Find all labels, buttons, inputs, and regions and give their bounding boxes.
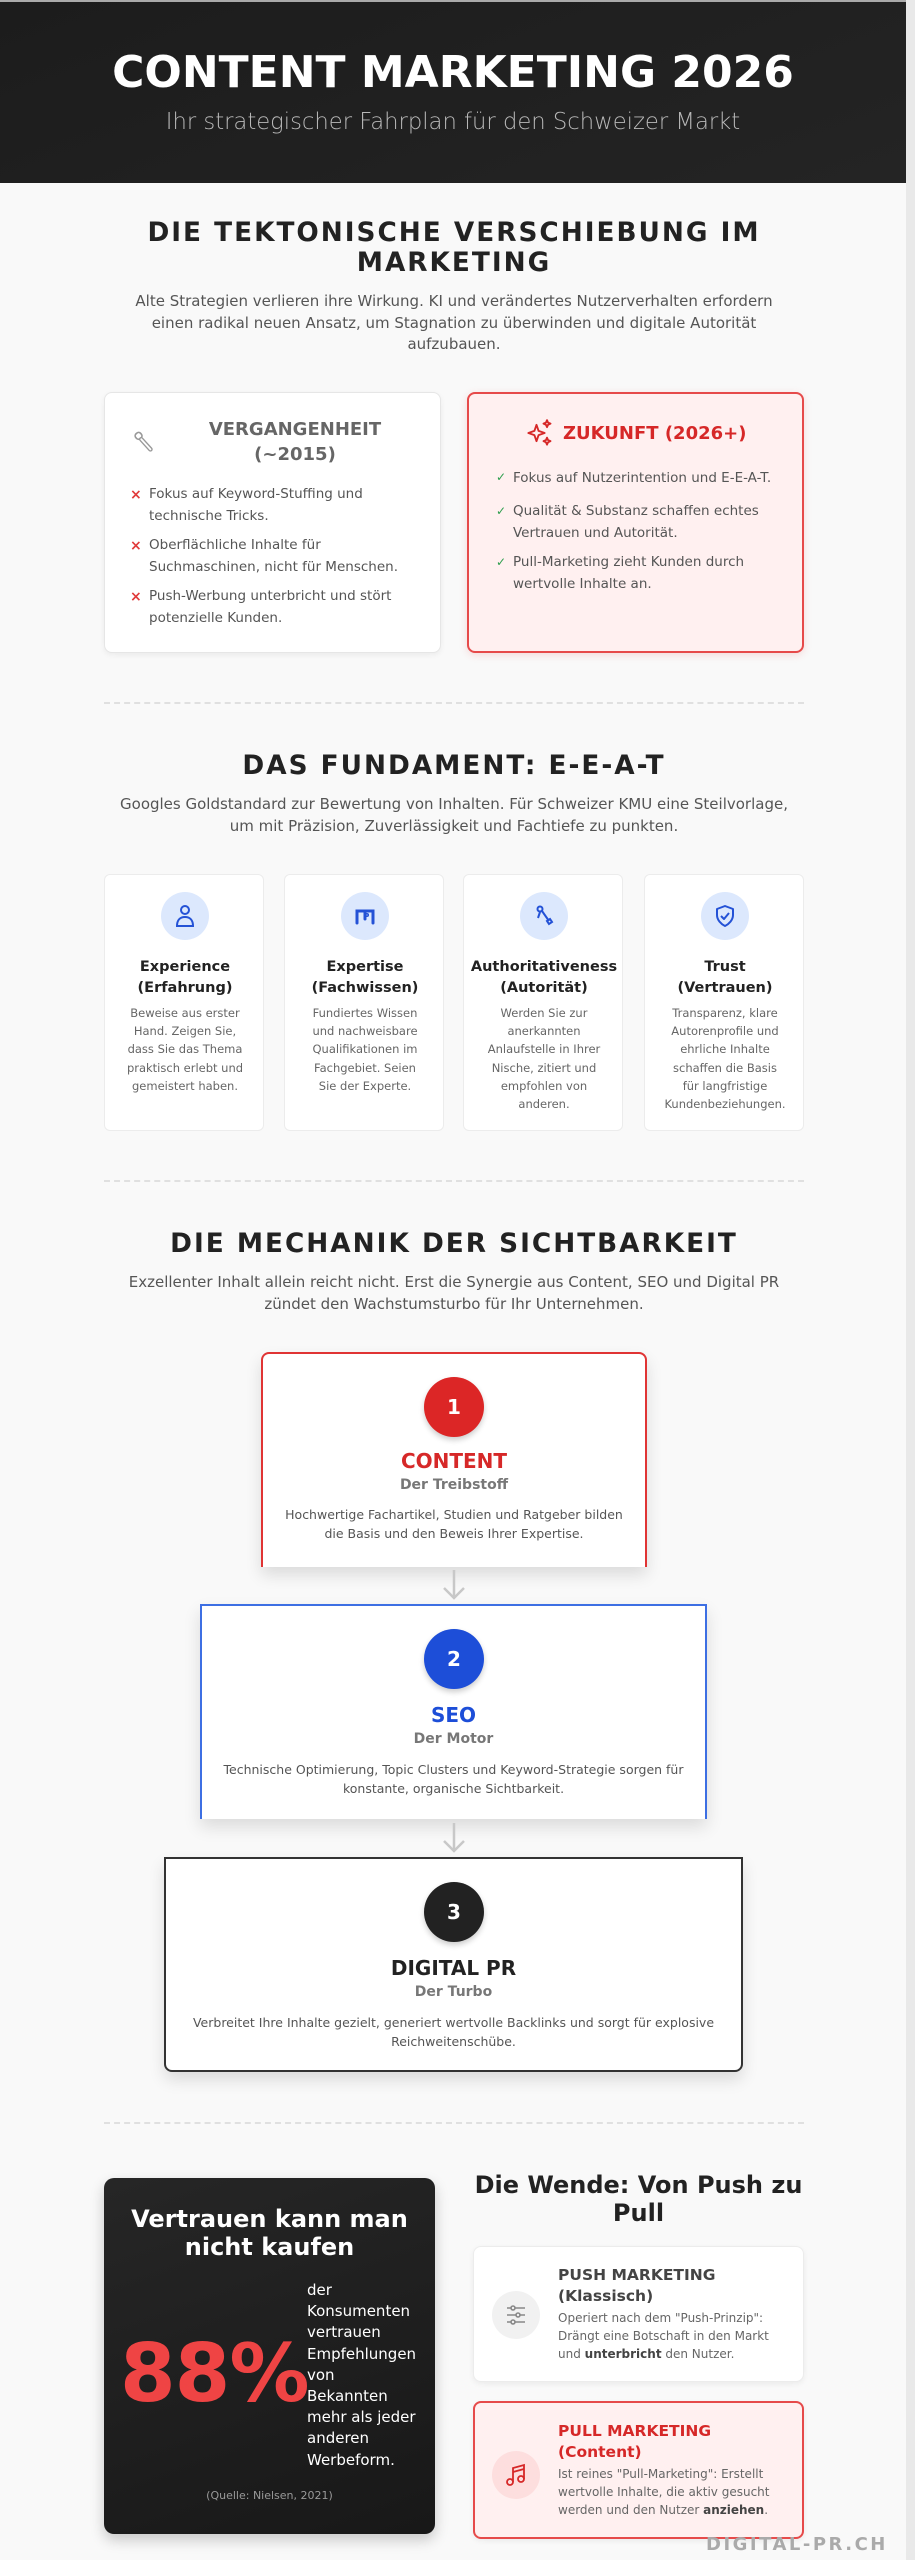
intro text 1 (135, 292, 773, 353)
intro text 3 (129, 1273, 779, 1312)
badge 1: 1 (447, 1395, 461, 1419)
big number: 88% (120, 2327, 308, 2420)
text (127, 1006, 243, 1093)
text: anerkannten (507, 1024, 581, 1038)
panel: pull marketing (473, 2401, 804, 2539)
bullet list: × (130, 589, 142, 605)
text: Werden Sie zur (501, 1006, 587, 1020)
text: Drängt eine Botschaft in den Markt (558, 2329, 769, 2343)
title: CONTENT MARKETING 2026 (112, 47, 794, 98)
panel: expertise (284, 874, 444, 1131)
bullet list: technische Tricks. (149, 508, 269, 524)
subtitle: Ihr strategischer Fahrplan für den Schweizer Markt (166, 109, 740, 135)
panel: digital pr step (164, 1857, 743, 2072)
text: Transparenz, klare (672, 1006, 778, 1020)
text (193, 2015, 714, 2049)
text: und unterbricht den Nutzer. (558, 2347, 734, 2361)
panel: zukunft (467, 392, 804, 653)
text: wertvolle Inhalte, die aktiv gesucht (558, 2485, 769, 2499)
panel: content step (261, 1352, 647, 1567)
header (0, 0, 906, 183)
title: SEO (431, 1703, 476, 1727)
stat text: der (307, 2281, 332, 2299)
heading: ZUKUNFT (2026+) (563, 423, 746, 444)
title: (Erfahrung) (138, 980, 232, 996)
stat text: vertrauen (307, 2323, 381, 2341)
title: Authoritativeness (471, 959, 617, 975)
source: (Quelle: Nielsen, 2021) (206, 2489, 333, 2502)
section heading: tektonische verschiebung: MARKETING (357, 248, 551, 278)
text: Verbreitet Ihre Inhalte gezielt, generiert wertvolle Backlinks und sorgt für explosive (193, 2015, 714, 2030)
text: ehrliche Inhalte (680, 1042, 770, 1056)
title: (Autorität) (500, 980, 588, 996)
bullet list: Push-Werbung unterbricht und stört (149, 588, 391, 604)
intro text 2: Googles Goldstandard zur Bewertung von Inhalten. Für Schweizer KMU eine Steilvorlage, (120, 795, 788, 813)
title (138, 959, 232, 996)
icon: music (492, 2451, 540, 2499)
text: Autorenprofile und (671, 1024, 779, 1038)
bullet list: Oberflächliche Inhalte für (149, 537, 321, 553)
title (558, 2266, 715, 2305)
title: (Fachwissen) (312, 980, 418, 996)
title: DIGITAL PR (391, 1956, 516, 1980)
stat text: Werbeform. (307, 2451, 395, 2469)
heading (209, 419, 382, 465)
text (558, 2311, 769, 2361)
section heading: tektonische verschiebung: DIE TEKTONISCHE VERSCHIEBUNG IM (147, 218, 761, 248)
text: Hochwertige Fachartikel, Studien und Ratgeber bilden (285, 1507, 623, 1522)
text: Fundiertes Wissen (313, 1006, 417, 1020)
text: empfohlen von (501, 1079, 587, 1093)
title (312, 959, 418, 996)
check list: ✓ (496, 555, 506, 569)
title: Expertise (326, 959, 404, 975)
text: Nische, zitiert und (492, 1061, 596, 1075)
bullet list: potenzielle Kunden. (149, 610, 282, 626)
intro text 1: aufzubauen. (407, 335, 501, 353)
intro text 3: Exzellenter Inhalt allein reicht nicht. Erst die Synergie aus Content, SEO und Digital PR (129, 1273, 779, 1291)
text (312, 1006, 418, 1093)
text: Sie der Experte. (319, 1079, 411, 1093)
footer brand: DIGITAL-PR.CH (706, 2534, 888, 2555)
text: und nachweisbare (312, 1024, 418, 1038)
text: für langfristige (683, 1079, 767, 1093)
section heading: mechanik: DIE MECHANIK DER SICHTBARKEIT (170, 1229, 738, 1259)
icon: expertise (341, 892, 389, 940)
badge 1 (424, 1377, 484, 1437)
text (664, 1006, 786, 1111)
check list: Vertrauen und Autorität. (513, 525, 678, 541)
text: schaffen die Basis (673, 1061, 777, 1075)
title: (Vertrauen) (677, 980, 772, 996)
title (558, 2422, 711, 2461)
intro text 3: zündet den Wachstumsturbo für Ihr Unternehmen. (264, 1294, 644, 1312)
text (488, 1006, 600, 1111)
intro text 2 (120, 795, 788, 834)
title: (Klassisch) (558, 2287, 653, 2305)
stat text: anderen (307, 2429, 369, 2447)
check list: Pull-Marketing zieht Kunden durch (513, 554, 744, 570)
badge 2 (424, 1629, 484, 1689)
title: CONTENT (401, 1449, 507, 1473)
check list: ✓ (496, 470, 506, 484)
panel: experience (104, 874, 264, 1131)
stat text: Konsumenten (307, 2302, 410, 2320)
section heading: e-e-a-t: DAS FUNDAMENT: E-E-A-T (242, 751, 666, 781)
icon: authority (520, 892, 568, 940)
arrow 2 (443, 1823, 465, 1852)
check list (496, 470, 771, 592)
text (223, 1762, 684, 1796)
title: (Content) (558, 2443, 642, 2461)
text: Technische Optimierung, Topic Clusters und Keyword-Strategie sorgen für (224, 1762, 684, 1777)
text: Reichweitenschübe. (391, 2034, 516, 2049)
icon: sliders (492, 2291, 540, 2339)
bullet list: × (130, 487, 142, 503)
heading: Vertrauen kann man (131, 2205, 408, 2233)
intro text 1: einen radikal neuen Ansatz, um Stagnation zu überwinden und digitale Autorität (152, 314, 756, 332)
text: Hand. Zeigen Sie, (134, 1024, 236, 1038)
text: gemeistert haben. (132, 1079, 238, 1093)
title: PUSH MARKETING (558, 2266, 715, 2284)
text: dass Sie das Thema (128, 1042, 242, 1056)
title: PULL MARKETING (558, 2422, 711, 2440)
check list: ✓ (496, 504, 506, 518)
heading: push to pull: Die Wende: Von Push zu (475, 2171, 802, 2199)
heading: push to pull: Pull (613, 2199, 664, 2227)
heading: (~2015) (254, 444, 336, 465)
text (558, 2467, 770, 2517)
icon: shield (701, 892, 749, 940)
subtitle: Der Motor (414, 1731, 493, 1747)
text: die Basis und den Beweis Ihrer Expertise. (324, 1526, 584, 1541)
text (285, 1507, 623, 1541)
text: Fachgebiet. Seien (314, 1061, 416, 1075)
panel: seo step (200, 1604, 707, 1819)
panel: vergangenheit (104, 392, 441, 653)
text: Operiert nach dem "Push-Prinzip": (558, 2311, 763, 2325)
badge 2: 2 (447, 1647, 461, 1671)
text: Qualifikationen im (312, 1042, 417, 1056)
panel: trust stat (104, 2178, 435, 2534)
panel: push marketing (473, 2246, 804, 2382)
badge 3: 3 (447, 1900, 461, 1924)
title: Experience (140, 959, 230, 975)
right edge strip (906, 0, 915, 2560)
subtitle: Der Treibstoff (400, 1477, 508, 1493)
heading: VERGANGENHEIT (209, 419, 381, 440)
heading: nicht kaufen (185, 2233, 354, 2261)
intro text 2: um mit Präzision, Zuverlässigkeit und Fachtiefe zu punkten. (230, 816, 678, 834)
badge 3 (424, 1882, 484, 1942)
section heading: tektonische verschiebung (147, 218, 761, 278)
stat text: mehr als jeder (307, 2408, 416, 2426)
title: Trust (704, 959, 746, 975)
stat text (307, 2281, 416, 2469)
arrow 1 (443, 1570, 465, 1600)
bullet list: Fokus auf Keyword-Stuffing und (149, 486, 363, 502)
bullet list: Suchmaschinen, nicht für Menschen. (149, 559, 398, 575)
title (677, 959, 772, 996)
bullet list (130, 486, 398, 626)
stat text: Bekannten (307, 2387, 388, 2405)
check list: wertvolle Inhalte an. (513, 576, 652, 592)
icon: user (161, 892, 209, 940)
text: Ist reines "Pull-Marketing": Erstellt (558, 2467, 763, 2481)
stat text: von (307, 2366, 335, 2384)
check list: Qualität & Substanz schaffen echtes (513, 503, 759, 519)
text: anderen. (518, 1097, 570, 1111)
text: werden und den Nutzer anziehen. (558, 2503, 768, 2517)
check list: Fokus auf Nutzerintention und E-E-A-T. (513, 470, 771, 486)
subtitle: Der Turbo (415, 1984, 492, 2000)
title (471, 959, 617, 996)
text: Kundenbeziehungen. (664, 1097, 786, 1111)
heading: push to pull (475, 2171, 802, 2227)
intro text 1: Alte Strategien verlieren ihre Wirkung. KI und verändertes Nutzerverhalten erfordern (135, 292, 773, 310)
text: Anlaufstelle in Ihrer (488, 1042, 600, 1056)
panel: trust (644, 874, 804, 1131)
text: konstante, organische Sichtbarkeit. (343, 1781, 564, 1796)
panel: authoritativeness (463, 874, 623, 1131)
text: praktisch erlebt und (127, 1061, 243, 1075)
icon: wrench (134, 432, 153, 452)
heading (131, 2205, 408, 2261)
text: Beweise aus erster (130, 1006, 240, 1020)
stat text: Empfehlungen (307, 2345, 416, 2363)
icon: sparkles (527, 419, 552, 446)
bullet list: × (130, 538, 142, 554)
